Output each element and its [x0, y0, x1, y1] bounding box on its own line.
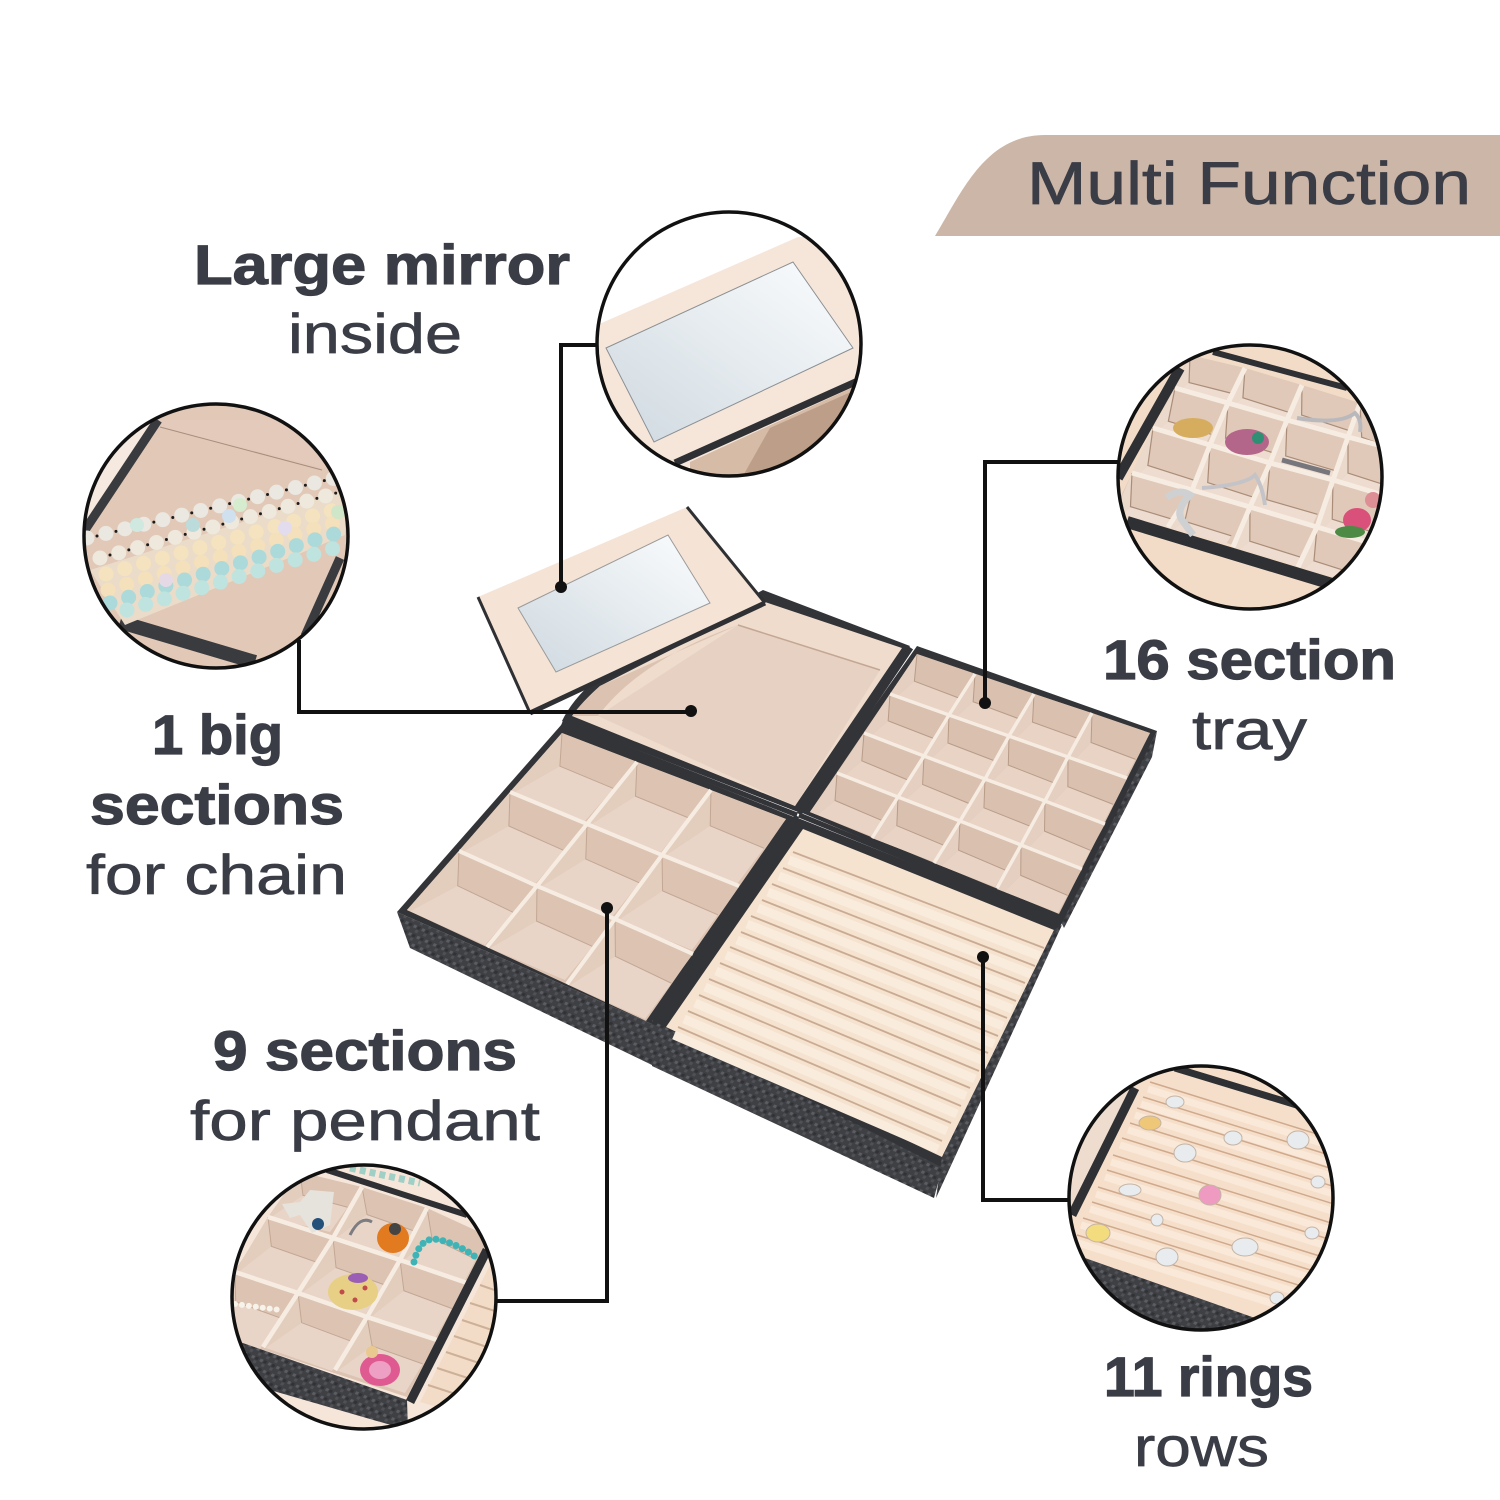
tray joins: [562, 648, 1062, 1024]
tray: 16 sections: [800, 646, 1157, 928]
tray: 11 ring rows: [652, 818, 1062, 1198]
label: 16 section tray: 16 section: [1103, 628, 1396, 691]
lid with mirror: [478, 507, 765, 713]
product: jewelry tray set: [397, 507, 1157, 1198]
label: 11 rings rows: rows: [1134, 1415, 1269, 1478]
inset: large mirror: [595, 210, 863, 478]
jewelry pieces: [235, 1190, 477, 1386]
label: large mirror inside: Large mirror: [194, 233, 570, 296]
label: 9 sections for pendant: [190, 1019, 541, 1152]
label: 1 big sections for chain: [86, 703, 347, 906]
label: large mirror inside: inside: [288, 302, 462, 365]
label: 16 section tray: [1103, 628, 1396, 761]
callout line: ring rows: [977, 951, 1070, 1200]
inset: 9 sections for pendant: [230, 1163, 498, 1431]
iridescent beads: [130, 498, 345, 587]
inset: 16 section tray: [1116, 343, 1384, 611]
rings: [1086, 1096, 1325, 1304]
tray: 1 big section: [562, 590, 910, 812]
label: 11 rings rows: 11 rings: [1104, 1345, 1313, 1408]
callout line: mirror: [555, 345, 597, 593]
banner title: Multi Function: [1027, 150, 1471, 217]
label: 11 rings rows: [1104, 1345, 1313, 1478]
label: 1 big sections for chain: 1 big: [152, 703, 283, 766]
banner: Multi Function: [935, 135, 1500, 236]
callout line: 9 sections: [497, 902, 613, 1301]
label: large mirror inside: [194, 233, 570, 365]
beads: [87, 478, 347, 610]
label: 1 big sections for chain: for chain: [86, 843, 347, 906]
callout line: 16 sections: [979, 462, 1118, 709]
label: 16 section tray: tray: [1192, 698, 1307, 761]
inset: 11 ring rows: [1067, 1064, 1335, 1332]
callout line: big section: [299, 640, 697, 717]
inset: beaded chain section: [80, 400, 355, 675]
knots: [97, 478, 340, 555]
label: 9 sections for pendant: 9 sections: [213, 1019, 517, 1082]
label: 9 sections for pendant: for pendant: [190, 1089, 541, 1152]
jewelry pieces: [1167, 413, 1381, 538]
tray: 9 sections: [397, 724, 794, 1066]
label: 1 big sections for chain: sections: [90, 773, 344, 836]
